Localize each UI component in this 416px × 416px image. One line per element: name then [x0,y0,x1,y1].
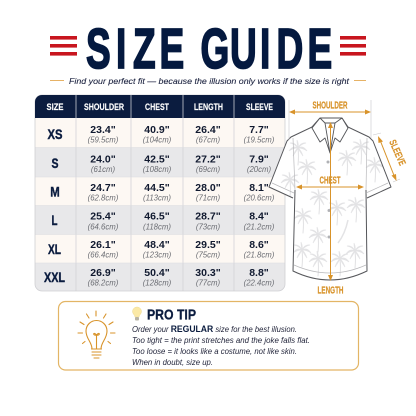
row S: (69cm) [196,165,221,174]
subtitle: Find your perfect fit — because the illusion only works if the size is right [69,76,350,86]
palm print [281,139,384,276]
row S: 7.9" [249,154,269,166]
collar [312,118,348,153]
row XS: (67cm) [196,136,221,144]
row XXL: (77cm) [196,278,221,288]
row XXL: (22.4cm) [244,278,275,288]
row L: 25.4" [90,210,116,222]
pro tip text: Order your REGULAR size for the best illusion. [132,324,297,334]
pro tip text: Too loose = it looks like a costume, not like skin. [132,347,297,356]
row XL: XL [48,241,61,257]
row S: (61cm) [91,165,116,174]
row XL: 29.5" [195,239,221,251]
row XXL: 50.4" [144,267,170,279]
row XXL: (68.2cm) [88,278,119,288]
shirt diagram [269,100,407,296]
row L: 46.5" [144,210,170,222]
row XXL: 30.3" [195,267,221,279]
icon: light bulb [78,311,115,358]
row M: 28.0" [195,182,221,194]
shirt outline [269,118,391,280]
row XS: 26.4" [195,124,221,136]
row XXL: (128cm) [143,278,172,288]
sleeve measure: SLEEVE [386,138,407,168]
row XS: 23.4" [90,124,116,136]
shoulder measure: SHOULDER [312,100,348,112]
row XXL [44,267,275,288]
row XL: 26.1" [90,239,116,251]
icon: small yellow bulb [132,307,142,320]
right red stripes [340,36,366,56]
pro tip text: When in doubt, size up. [132,358,213,367]
row M: M [50,184,60,200]
row L [52,210,275,232]
row XS: (104cm) [143,136,172,144]
guide lines [289,100,400,182]
row S: 42.5" [144,154,170,166]
row S: S [52,155,58,171]
row S [52,154,272,174]
row XL: (123cm) [143,250,172,260]
row S: 24.0" [90,154,116,166]
table header [35,95,285,118]
row XXL: 26.9" [90,267,116,279]
shirt fill [269,118,391,280]
row XS: XS [48,126,62,142]
row L: 28.7" [195,210,221,222]
chest measure [296,176,364,190]
row XS [48,124,275,144]
row XXL: 8.8" [249,267,269,279]
chest measure: CHEST [320,176,340,186]
row M: (62.8cm) [88,194,119,202]
row L: (118cm) [143,222,171,232]
row XS: (59.5cm) [88,136,119,144]
title: SIZE GUIDE [86,17,332,81]
table header: LENGTH [194,102,223,112]
left red stripes [50,36,77,56]
row XS: (19.5cm) [244,136,275,144]
size table [35,95,285,291]
pro tip text: Too tight = the print stretches and the joke falls flat. [132,336,310,345]
row S: (20cm) [247,165,272,174]
buttons [326,160,330,238]
shoulder measure [289,100,371,114]
row XXL: XXL [44,269,65,285]
table header: SHOULDER [84,102,124,112]
row S: (108cm) [143,165,172,174]
row XL: 8.6" [249,239,269,251]
row M [50,182,275,202]
row M: (113cm) [143,194,171,202]
row XL: (75cm) [196,250,221,260]
row L: L [52,212,58,228]
row XS: 40.9" [144,124,170,136]
row L: 8.4" [249,210,269,222]
pro tip text [132,324,310,367]
table header: CHEST [145,102,169,112]
length measure: LENGTH [318,286,344,296]
row L: (73cm) [196,222,221,232]
row XL: 48.4" [144,239,170,251]
pro tip panel [58,302,358,370]
row L: (64.6cm) [88,222,119,232]
row XL: (66.4cm) [88,250,119,260]
table header: SLEEVE [246,102,273,112]
row M: (71cm) [196,194,221,202]
row M: 24.7" [90,182,116,194]
sleeve measure [378,136,407,181]
row XL [48,239,275,260]
table header: SIZE [46,102,64,112]
row XS: 7.7" [249,124,269,136]
pro tip heading: PRO TIP [147,306,196,324]
row XL: (21.8cm) [244,250,275,260]
row M: 44.5" [144,182,170,194]
length measure [318,122,344,296]
row L: (21.2cm) [244,222,275,232]
row M: 8.1" [249,182,269,194]
row M: (20.6cm) [244,194,275,202]
row S: 27.2" [195,154,221,166]
